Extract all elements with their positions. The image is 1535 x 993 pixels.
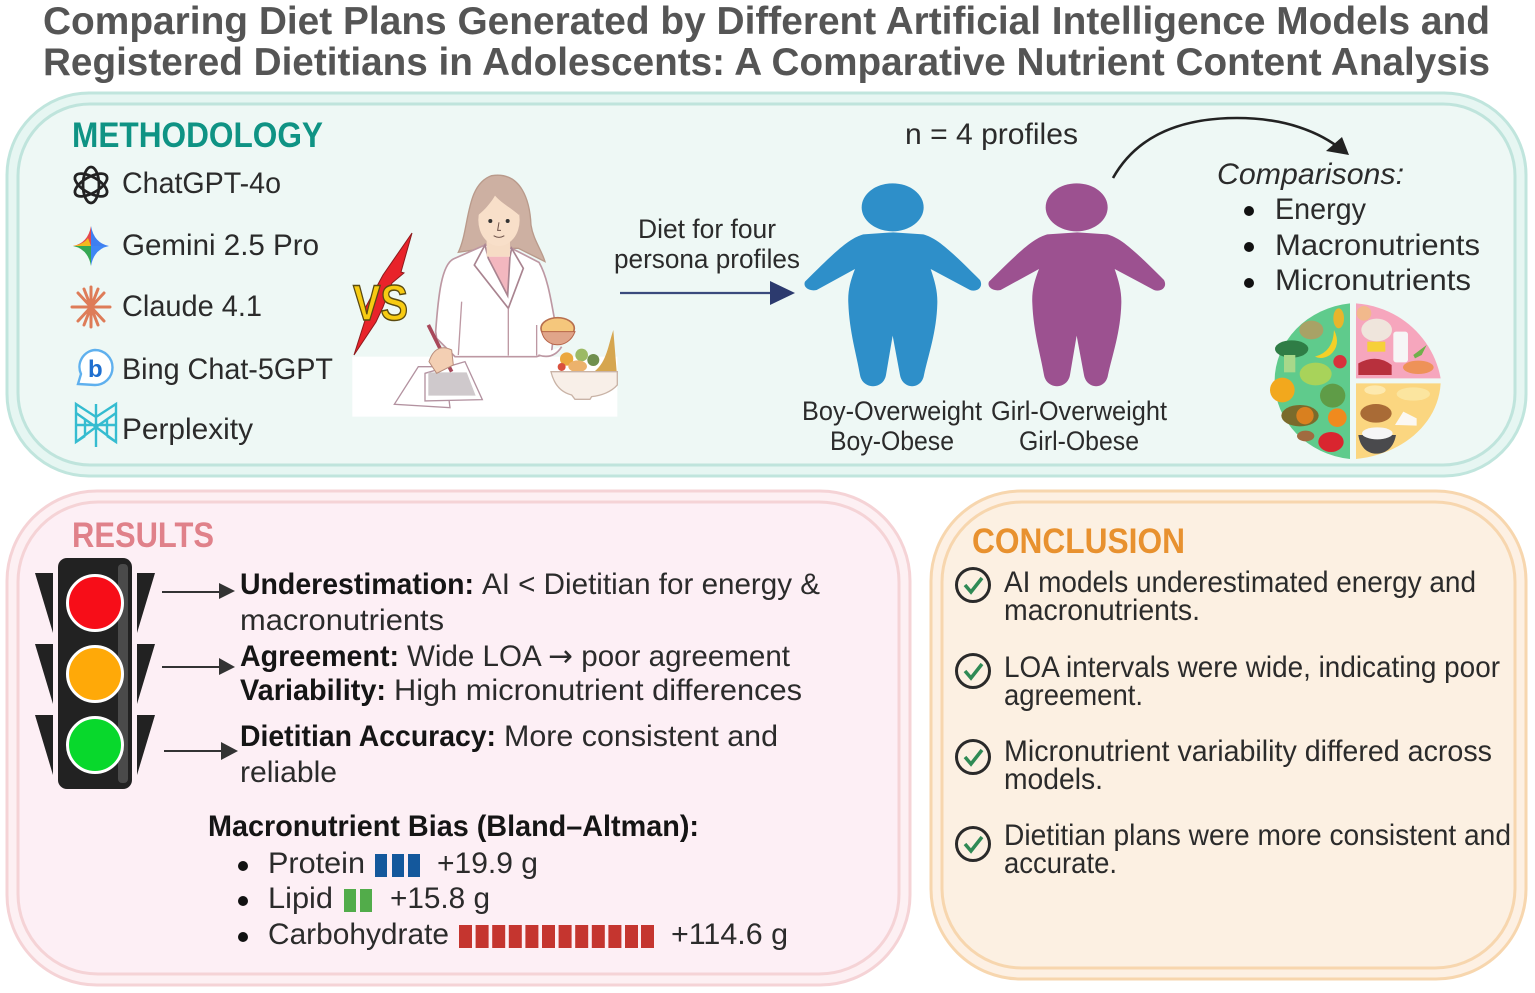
text: conclusion 2: agreement. <box>1004 679 1143 712</box>
arrow: underestimation <box>162 583 235 599</box>
text: conclusion 3: models. <box>1004 763 1103 796</box>
illustration: dietitian with food <box>352 175 617 417</box>
panel: methodology <box>7 93 1526 476</box>
text: underestimation: Underestimation: <box>240 568 474 601</box>
panel: results <box>7 491 910 985</box>
icon: Claude <box>72 287 110 327</box>
list: comparisons: Macronutrients <box>1275 229 1480 262</box>
text: conclusion 1: macronutrients. <box>1004 594 1200 627</box>
text: dietitian accuracy: reliable <box>240 756 337 789</box>
arrow: dietitian accuracy <box>164 742 238 760</box>
icon: check 1 <box>956 568 990 602</box>
labels: girl profiles <box>991 396 1167 456</box>
list: comparisons: Micronutrients <box>1275 264 1471 297</box>
text: conclusion 4: accurate. <box>1004 847 1117 880</box>
list: comparisons: Comparisons: <box>1217 158 1404 191</box>
text: diet for four persona profiles <box>614 214 800 274</box>
text: agreement <box>240 639 791 674</box>
labels: boy profiles: Boy-Obese <box>830 426 954 456</box>
text: conclusion 2 <box>1004 651 1500 712</box>
text: variability: High micronutrient differences <box>394 674 802 707</box>
heading: macronutrient bias: Macronutrient Bias (Bland–Altman): <box>208 810 699 843</box>
list: comparisons: Energy <box>1275 193 1366 226</box>
row: protein bias <box>238 847 538 880</box>
text: conclusion 3 <box>1004 735 1492 796</box>
labels: girl profiles: Girl-Obese <box>1019 426 1139 456</box>
text: dietitian accuracy: Dietitian Accuracy: <box>240 720 496 753</box>
text: diet for four persona profiles: Diet for four <box>638 214 776 244</box>
title <box>43 0 1490 84</box>
icon: check 4 <box>956 828 990 860</box>
icon: ChatGPT <box>71 167 111 203</box>
row: protein bias: +19.9 g <box>437 847 538 880</box>
icon: boy figure <box>804 183 981 386</box>
row: lipid bias: Lipid <box>268 882 333 915</box>
icon: traffic light <box>35 558 155 789</box>
row: carbohydrate bias: +114.6 g <box>671 918 788 951</box>
text: conclusion 2: LOA intervals were wide, indicating poor <box>1004 651 1500 684</box>
arrow: to profiles <box>620 281 795 305</box>
text: dietitian accuracy <box>240 720 778 789</box>
text: diet for four persona profiles: persona profiles <box>614 244 800 274</box>
row: lipid bias <box>238 882 490 915</box>
arrow: agreement <box>162 658 235 675</box>
heading: conclusion: CONCLUSION <box>972 522 1185 561</box>
icon: girl figure <box>988 183 1165 386</box>
label: Claude: Claude 4.1 <box>122 290 262 323</box>
icon: Bing Chat: b <box>88 356 103 383</box>
label: Gemini: Gemini 2.5 Pro <box>122 229 319 262</box>
text: agreement: Wide LOA → poor agreement <box>407 639 791 674</box>
label: Bing Chat: Bing Chat-5GPT <box>122 353 333 386</box>
icon: Gemini <box>73 226 109 266</box>
title: Registered Dietitians in Adolescents: A Comparative Nutrient Content Analysis <box>43 41 1490 84</box>
text: conclusion 1: AI models underestimated energy and <box>1004 566 1476 599</box>
icon: VS lightning <box>353 233 412 355</box>
labels: girl profiles: Girl-Overweight <box>991 396 1167 426</box>
text: agreement: Agreement: <box>240 640 399 673</box>
title: Comparing Diet Plans Generated by Different Artificial Intelligence Models and <box>43 0 1490 43</box>
labels: boy profiles: Boy-Overweight <box>802 396 982 426</box>
icon: food plate <box>1270 303 1441 459</box>
icon: VS lightning: VS <box>353 275 408 331</box>
row: carbohydrate bias <box>238 918 788 951</box>
text: conclusion 3: Micronutrient variability differed across <box>1004 735 1492 768</box>
arrow: curved to comparisons <box>1113 118 1349 178</box>
text: underestimation: AI < Dietitian for energy & <box>482 568 820 601</box>
label: Perplexity: Perplexity <box>122 413 253 446</box>
icon: check 2 <box>956 654 990 688</box>
row: protein bias: Protein <box>268 847 365 880</box>
row: carbohydrate bias: Carbohydrate <box>268 918 449 951</box>
text: conclusion 1 <box>1004 566 1476 627</box>
list: comparisons <box>1217 158 1480 297</box>
row: lipid bias: +15.8 g <box>390 882 490 915</box>
heading: results: RESULTS <box>72 516 214 555</box>
text: variability: Variability: <box>240 674 386 707</box>
label: ChatGPT: ChatGPT-4o <box>122 167 281 200</box>
text: underestimation <box>240 568 820 637</box>
text: dietitian accuracy: More consistent and <box>504 720 778 753</box>
icon: Perplexity <box>76 404 116 447</box>
text: underestimation: macronutrients <box>240 604 444 637</box>
text: conclusion 4: Dietitian plans were more consistent and <box>1004 819 1511 852</box>
label: n = 4 profiles: n = 4 profiles <box>905 118 1078 151</box>
icon: Bing Chat <box>78 350 112 385</box>
labels: boy profiles <box>802 396 982 456</box>
icon: check 3 <box>956 740 990 774</box>
text: conclusion 4 <box>1004 819 1511 880</box>
panel: conclusion <box>931 491 1526 979</box>
heading: methodology: METHODOLOGY <box>72 116 323 155</box>
